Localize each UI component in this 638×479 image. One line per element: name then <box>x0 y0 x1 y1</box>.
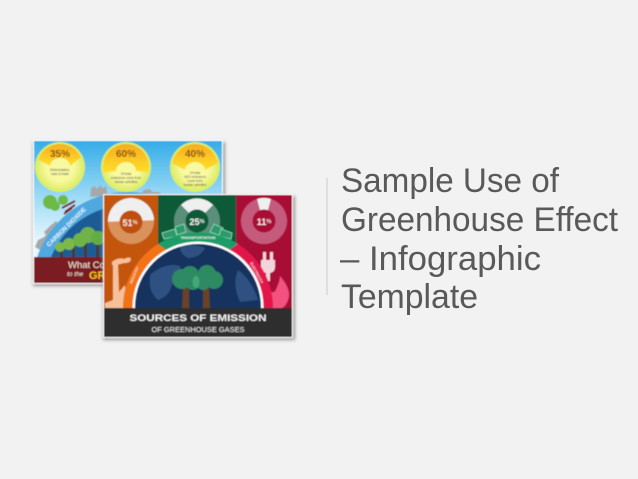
heading: – Infographic <box>340 240 541 278</box>
arc labels: ELECTRICITY <box>249 262 264 285</box>
earth <box>132 240 264 309</box>
arc labels <box>129 236 264 285</box>
arc: electricity <box>228 244 273 308</box>
sun: 40 percent <box>170 140 220 192</box>
arc: transportation <box>158 232 238 251</box>
front card title: OF GREENHOUSE GASES <box>152 327 245 334</box>
back card title: What Co <box>68 260 105 271</box>
sun: 40 percent: Of total <box>190 171 200 175</box>
icon: right truck <box>210 224 232 239</box>
arc labels: TRANSPORTATION <box>181 236 216 240</box>
icon: plug <box>261 252 275 281</box>
donut: 51 percent <box>107 197 154 244</box>
sun: 35 percent: Deforestation, <box>50 168 70 172</box>
donut: 25 percent: % <box>200 219 205 225</box>
sun: 35 percent: 35% <box>50 149 70 160</box>
panel: industry <box>104 195 158 308</box>
sun: 60 percent <box>101 140 151 192</box>
trees <box>172 265 223 308</box>
heading: Sample Use of <box>341 162 560 200</box>
back card title: GR <box>89 270 106 282</box>
sun: 40 percent: human activities <box>184 183 207 187</box>
sun: 60 percent: human activities <box>115 180 138 184</box>
sun: 60 percent: emissions come from <box>111 176 141 180</box>
donut: 51 percent: 51 <box>123 218 133 228</box>
carbon dioxide arc and earth <box>36 192 149 258</box>
slide canvas <box>31 140 618 342</box>
factory silhouettes and cars <box>35 185 161 250</box>
front card: sources of emission <box>100 193 297 342</box>
sun: 35 percent <box>35 140 85 192</box>
panel: electricity <box>236 195 293 308</box>
title band <box>104 308 293 338</box>
front card title <box>130 313 267 334</box>
icon: left truck <box>162 224 186 239</box>
donut: 25 percent: 25 <box>190 217 200 227</box>
back card: what contributes to the greenhouse effect <box>31 140 227 288</box>
heading <box>340 162 619 316</box>
icon: flame <box>271 276 290 309</box>
icon: factory <box>105 258 131 308</box>
donut: 51 percent: % <box>133 220 138 226</box>
forest <box>55 227 105 257</box>
sun: 60 percent: Of total <box>121 172 131 176</box>
continents <box>150 245 258 302</box>
donut: 11 percent <box>241 198 287 244</box>
sun: 35 percent: uses & trade <box>51 172 69 176</box>
divider <box>326 178 328 295</box>
donut: 11 percent: % <box>266 219 271 225</box>
sun: 40 percent: N2O emissions <box>184 175 206 179</box>
arc labels: INDUSTRY <box>129 265 140 284</box>
front card title: SOURCES OF EMISSION <box>130 313 267 324</box>
sun: 60 percent: 60% <box>116 149 136 160</box>
title band <box>33 256 104 284</box>
back card: what contributes to the greenhouse effect: CARBON DIOXIDE <box>46 207 88 248</box>
back card title: to the <box>67 271 84 278</box>
donut: 11 percent: 11 <box>257 217 266 227</box>
sun: 40 percent: come from <box>187 179 203 183</box>
arc: industry <box>123 244 168 308</box>
heading: Template <box>341 278 478 316</box>
panel: transportation <box>157 194 237 250</box>
back card title <box>66 260 104 280</box>
deforested tree <box>43 195 75 214</box>
donut: 25 percent <box>173 197 221 236</box>
heading: Greenhouse Effect <box>341 201 619 239</box>
sun: 40 percent: 40% <box>185 149 205 160</box>
